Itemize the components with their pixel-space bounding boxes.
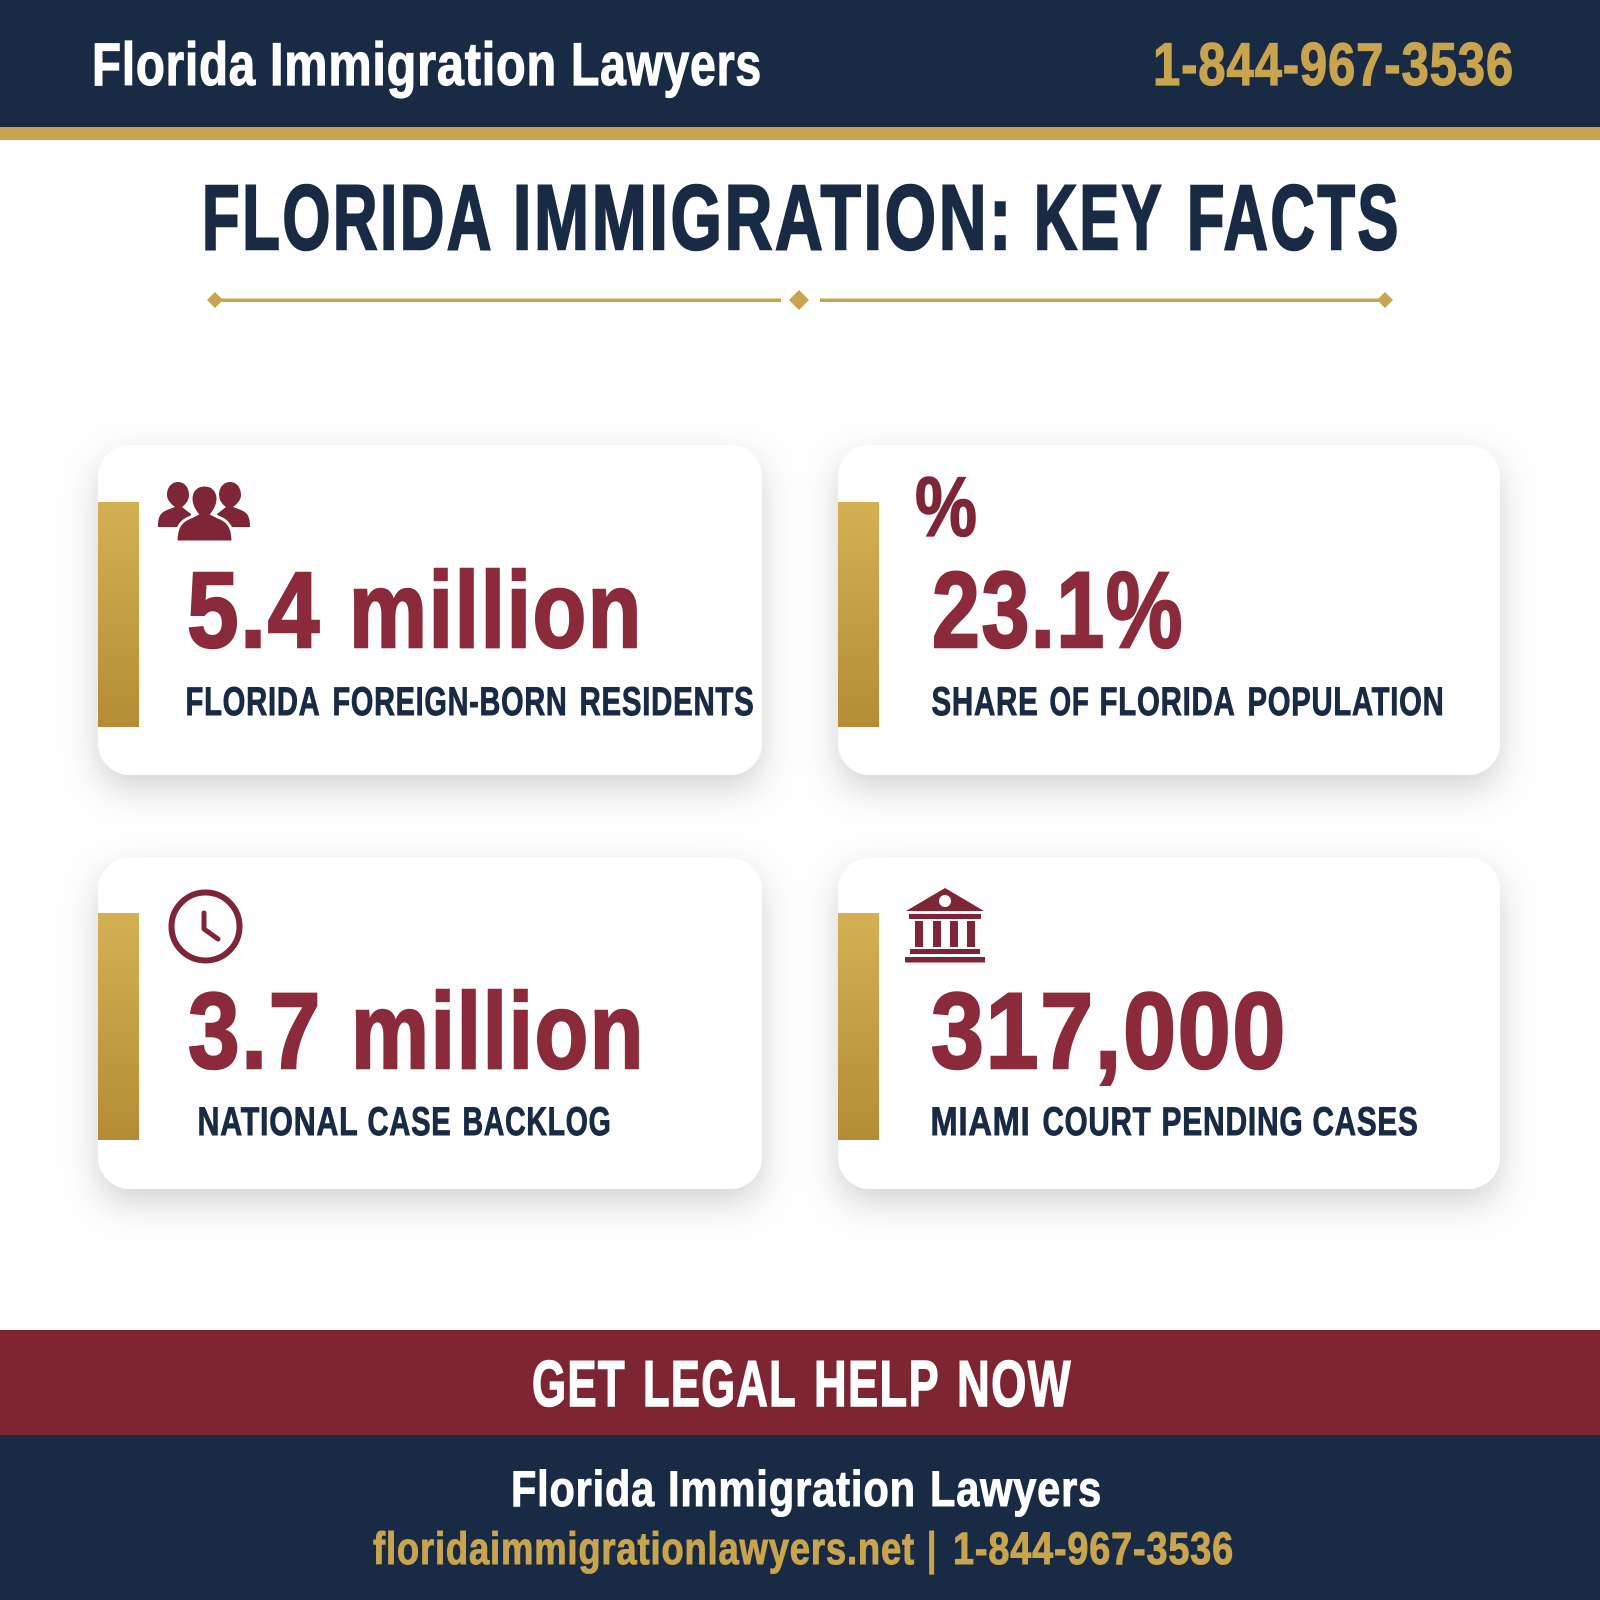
- footer: [0, 1435, 1600, 1600]
- title: [202, 167, 1401, 269]
- stat value: [188, 970, 645, 1091]
- panel: Miami court: [838, 858, 1500, 1189]
- title divider: [207, 290, 1393, 310]
- stat label: FOREIGN-BORN: [332, 680, 568, 724]
- footer firm name: Immigration: [668, 1461, 916, 1517]
- panel: share of population: [838, 445, 1500, 775]
- footer firm name: Lawyers: [930, 1461, 1102, 1517]
- icon: percent: %: [915, 460, 977, 554]
- title: FLORIDA: [202, 167, 494, 269]
- footer contact line: |: [927, 1523, 937, 1575]
- stat label: COURT: [1042, 1100, 1152, 1144]
- panel: national backlog: [98, 858, 762, 1189]
- call to action text: [532, 1347, 1072, 1420]
- icon: courthouse: [905, 888, 985, 962]
- call to action text: GET: [532, 1347, 626, 1420]
- stat label: CASE: [368, 1100, 452, 1144]
- stat value: 3.7: [188, 970, 322, 1091]
- header phone number: 1-844-967-3536: [1153, 31, 1514, 98]
- stat label: MIAMI: [930, 1100, 1030, 1144]
- stat value: million: [351, 970, 645, 1091]
- stat label: OF: [1050, 680, 1090, 724]
- footer contact line: floridaimmigrationlawyers.net: [373, 1523, 915, 1574]
- stat value: [187, 549, 643, 670]
- stat label: [930, 1100, 1418, 1144]
- call to action text: NOW: [957, 1347, 1072, 1420]
- footer firm name: [511, 1461, 1102, 1517]
- footer contact line: 1-844-967-3536: [953, 1523, 1234, 1574]
- stat value: 5.4: [187, 549, 321, 670]
- stat value: 23.1%: [932, 549, 1184, 670]
- header bar: [0, 0, 1600, 140]
- title: FACTS: [1187, 167, 1401, 269]
- call to action text: LEGAL: [643, 1347, 797, 1420]
- stat label: POPULATION: [1248, 680, 1444, 724]
- header firm name: [92, 31, 762, 98]
- stat label: CASES: [1312, 1100, 1418, 1144]
- icon: people: [158, 482, 250, 542]
- stat label: NATIONAL: [198, 1100, 358, 1144]
- stat label: PENDING: [1162, 1100, 1304, 1144]
- call to action text: HELP: [814, 1347, 940, 1420]
- title: IMMIGRATION:: [513, 167, 1014, 269]
- stat value: million: [349, 549, 643, 670]
- stat label: FLORIDA: [186, 680, 320, 724]
- title: KEY: [1034, 167, 1164, 269]
- call to action band: [0, 1330, 1600, 1435]
- stat label: BACKLOG: [462, 1100, 612, 1144]
- stat label: FLORIDA: [1100, 680, 1236, 724]
- header firm name: Immigration: [270, 31, 557, 98]
- stat label: [198, 1100, 612, 1144]
- icon: clock: [172, 892, 240, 960]
- header firm name: Florida: [92, 31, 256, 98]
- stat label: [186, 680, 754, 724]
- footer firm name: Florida: [511, 1461, 655, 1517]
- stat label: RESIDENTS: [580, 680, 754, 724]
- stat value: 317,000: [931, 970, 1287, 1091]
- panel: foreign-born residents: [98, 445, 762, 775]
- stat label: [932, 680, 1444, 724]
- header firm name: Lawyers: [571, 31, 762, 98]
- stat label: SHARE: [932, 680, 1038, 724]
